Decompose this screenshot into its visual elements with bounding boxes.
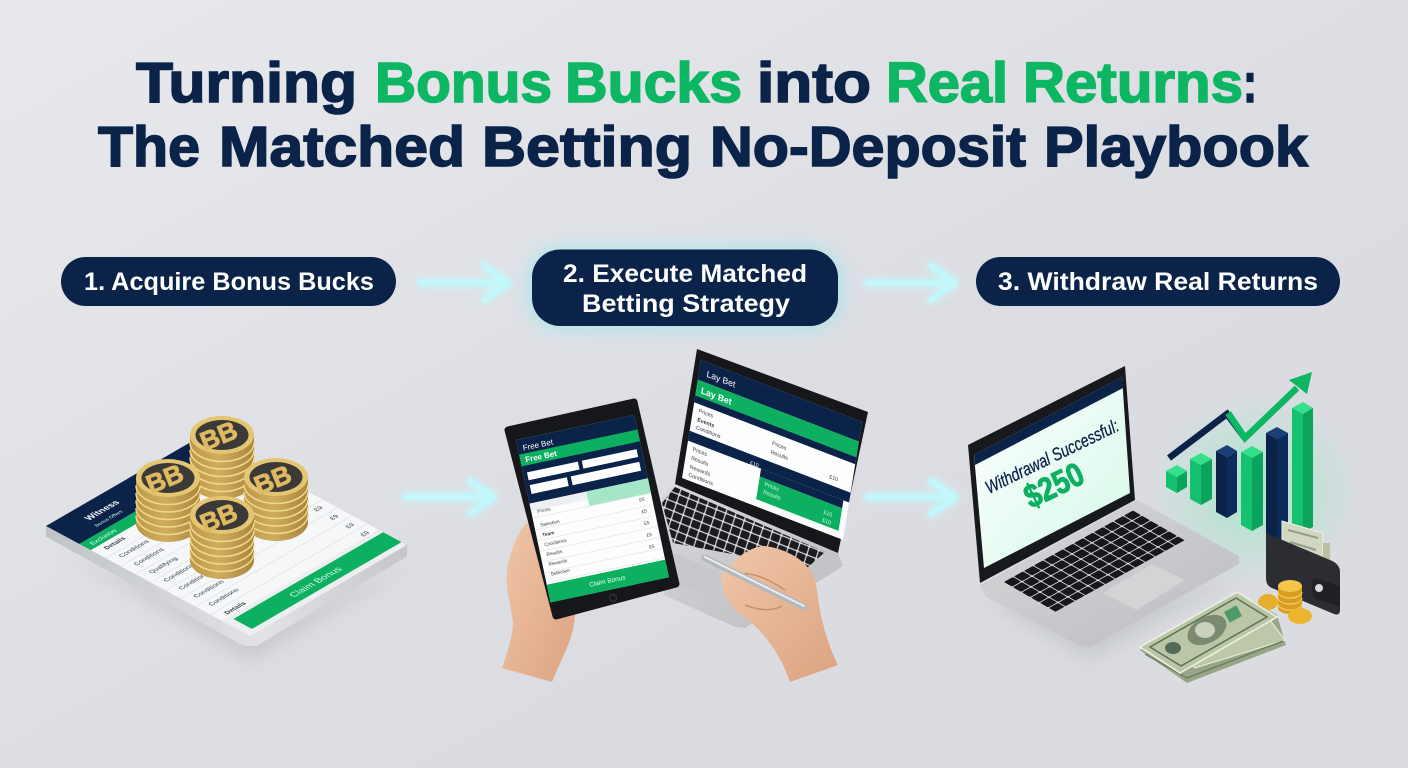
tablet home button bbox=[610, 594, 616, 602]
left hand bbox=[502, 522, 575, 682]
laptop keyboard bbox=[662, 487, 825, 568]
gold coins bbox=[1258, 580, 1312, 624]
step 1 pill: 1. Acquire Bonus Bucks bbox=[84, 268, 374, 296]
claim bonus button: Claim Bonus bbox=[287, 566, 345, 599]
claim bonus button bbox=[233, 532, 402, 629]
bonus app screen: £9 bbox=[312, 505, 325, 513]
step 2 pill: 2. Execute Matched bbox=[563, 260, 807, 288]
step 3 pill bbox=[976, 257, 1340, 306]
tablet screen: free bet: £5 bbox=[646, 532, 653, 539]
right hand bbox=[722, 546, 838, 682]
laptop lid bbox=[968, 366, 1135, 583]
withdrawal message bbox=[982, 416, 1122, 515]
tablet screen: free bet: Team bbox=[542, 530, 555, 539]
laptop screen: lay bet bbox=[682, 360, 862, 540]
laptop screen: lay bet: £10 bbox=[829, 474, 838, 483]
green chart glow bbox=[1150, 395, 1360, 585]
coin stack: left: BB bbox=[142, 458, 188, 500]
coin stack: front: BB bbox=[196, 497, 242, 539]
tablet screen: free bet: Results bbox=[546, 549, 563, 558]
tablet screen: free bet: £5 bbox=[649, 544, 655, 551]
title: Playbook bbox=[1044, 115, 1308, 179]
step 2 pill: Betting Strategy bbox=[582, 290, 790, 318]
arrow: step 1 to step 2 bbox=[420, 266, 508, 300]
laptop trackpad bbox=[668, 553, 733, 597]
coin stack: left bbox=[136, 458, 200, 542]
title bbox=[98, 51, 1308, 179]
bonus app screen: Details bbox=[103, 536, 128, 551]
bonus app screen: Conditions bbox=[132, 547, 167, 567]
tablet screen: free bet: Conditions bbox=[544, 538, 568, 548]
laptop screen: lay bet: Results bbox=[770, 450, 788, 462]
laptop screen: lay bet: £10 bbox=[750, 460, 759, 470]
step 1 pill bbox=[61, 257, 396, 306]
bonus app screen: Conditions bbox=[177, 571, 212, 591]
growth chart bbox=[1166, 372, 1313, 547]
laptop screen: lay bet: £10 bbox=[823, 510, 833, 519]
title: : bbox=[1243, 51, 1257, 115]
arrow: step 2 to step 3 bbox=[867, 266, 955, 300]
laptop screen: lay bet: Results bbox=[763, 490, 781, 502]
bonus app screen: £9 bbox=[328, 514, 341, 521]
bonus app screen: Conditions bbox=[118, 539, 152, 559]
title: Bucks bbox=[565, 51, 742, 115]
bonus app screen: Exclusive bbox=[88, 528, 120, 546]
tablet screen: free bet: Free Bet bbox=[524, 449, 558, 464]
platform shadow bbox=[60, 550, 410, 660]
laptop screen: lay bet: Prices bbox=[764, 482, 779, 493]
withdrawal message: $250 bbox=[1018, 455, 1090, 515]
laptop screen: lay bet: £10 bbox=[822, 517, 831, 527]
laptop screen: lay bet: Events bbox=[697, 417, 715, 430]
bonus app screen: Conditions bbox=[207, 587, 242, 607]
tablet screen: free bet: Free Bet bbox=[522, 437, 555, 453]
step 3 pill: 3. Withdraw Real Returns bbox=[998, 268, 1318, 296]
laptop shadow bbox=[985, 575, 1240, 660]
bonus app screen: £9 bbox=[344, 522, 357, 530]
laptop screen: lay bet: Rewards bbox=[689, 464, 711, 478]
cash stack bbox=[1140, 592, 1286, 683]
laptop screen: lay bet: Conditions bbox=[688, 472, 713, 488]
tablet screen: free bet: Selection bbox=[540, 519, 561, 529]
laptop screen: lay bet: Results bbox=[691, 456, 709, 468]
bonus app screen bbox=[46, 435, 407, 636]
tablet screen: free bet: Claim Bonus bbox=[589, 574, 627, 589]
bonus app screen: Details bbox=[223, 601, 249, 616]
laptop screen: lay bet: Prices bbox=[772, 441, 787, 452]
laptop trackpad bbox=[1103, 564, 1185, 610]
step 2 pill bbox=[528, 247, 842, 329]
illustration: tablet, laptop and hands bbox=[502, 349, 868, 682]
laptop screen: lay bet: Prices bbox=[698, 408, 714, 420]
wallet bbox=[1266, 521, 1340, 614]
title: Returns bbox=[1023, 51, 1243, 115]
withdrawal message: Withdrawal Successful: bbox=[982, 416, 1122, 498]
bonus app screen: £9 bbox=[359, 530, 372, 538]
stylus bbox=[705, 557, 804, 607]
tablet screen: free bet bbox=[516, 415, 669, 602]
laptop base bbox=[662, 484, 843, 628]
coin stack: back: BB bbox=[196, 415, 242, 457]
title: No-Deposit bbox=[710, 115, 1026, 179]
title: Real bbox=[886, 51, 1008, 115]
tablet screen: free bet: Rewards bbox=[548, 558, 568, 568]
title: Turning bbox=[136, 51, 357, 115]
arrow: lower row to tablet bbox=[405, 481, 494, 514]
tablet screen: free bet: £5 bbox=[644, 520, 650, 527]
withdrawal screen bbox=[974, 377, 1130, 568]
illustration: bonus bucks app with coin stacks bbox=[46, 415, 410, 660]
illustration: withdrawal laptop, chart, wallet and cash bbox=[968, 366, 1360, 683]
platform base bbox=[47, 526, 406, 645]
laptop keyboard bbox=[1003, 510, 1185, 612]
bonus app screen: Conditions bbox=[192, 579, 227, 599]
tablet screen: free bet: Selection bbox=[550, 568, 571, 578]
laptop screen: lay bet: Lay Bet bbox=[706, 369, 737, 390]
bonus app screen: Conditions bbox=[162, 563, 197, 583]
tablet screen: free bet: £5 bbox=[639, 497, 645, 504]
laptop screen: lay bet: Prices bbox=[692, 447, 708, 458]
laptop lid bbox=[675, 349, 868, 553]
coin stack: back bbox=[190, 415, 254, 499]
trend arrow bbox=[1169, 372, 1312, 458]
bonus app screen: Witness bbox=[82, 499, 122, 522]
title: Betting bbox=[482, 115, 692, 179]
tablet body bbox=[508, 402, 676, 616]
arrow: tablet row to withdrawal bbox=[867, 481, 955, 514]
title: Bonus bbox=[375, 51, 552, 115]
laptop screen: lay bet: Conditions bbox=[696, 425, 721, 440]
title: Matched bbox=[219, 115, 465, 179]
tablet screen: free bet: £5 bbox=[641, 508, 648, 515]
bonus app screen: Qualifying bbox=[147, 556, 180, 575]
laptop screen: lay bet: Lay Bet bbox=[700, 385, 732, 407]
coin stack: right: BB bbox=[250, 459, 296, 501]
coin stack: right bbox=[244, 458, 308, 541]
bonus app screen: Bonus Offers bbox=[93, 510, 125, 528]
laptop base bbox=[980, 500, 1239, 647]
title: into bbox=[757, 51, 871, 115]
title: The bbox=[98, 115, 200, 179]
coin stack: front bbox=[190, 496, 254, 579]
tablet screen: free bet: Prices bbox=[537, 506, 552, 515]
